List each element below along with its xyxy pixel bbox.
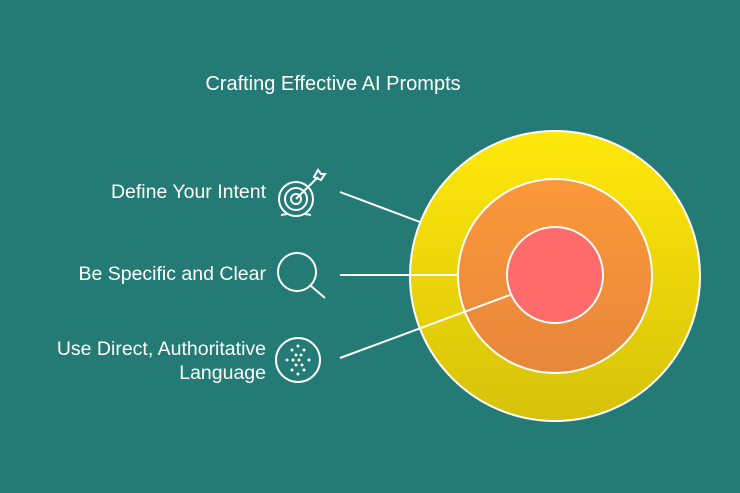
label: direct language [57,338,266,384]
icon: target [279,170,325,216]
label: direct language: Use Direct, Authoritative [57,338,266,360]
title: Crafting Effective AI Prompts [205,73,461,95]
label: direct language: Language [179,362,266,384]
connector lines [340,192,510,358]
inner circle [507,227,603,323]
label: define intent: Define Your Intent [111,181,266,203]
label: be specific: Be Specific and Clear [78,263,266,285]
middle circle [458,179,652,373]
icon: magnifier [278,253,325,298]
icon: dotted circle [276,338,320,382]
outer circle [410,131,700,421]
